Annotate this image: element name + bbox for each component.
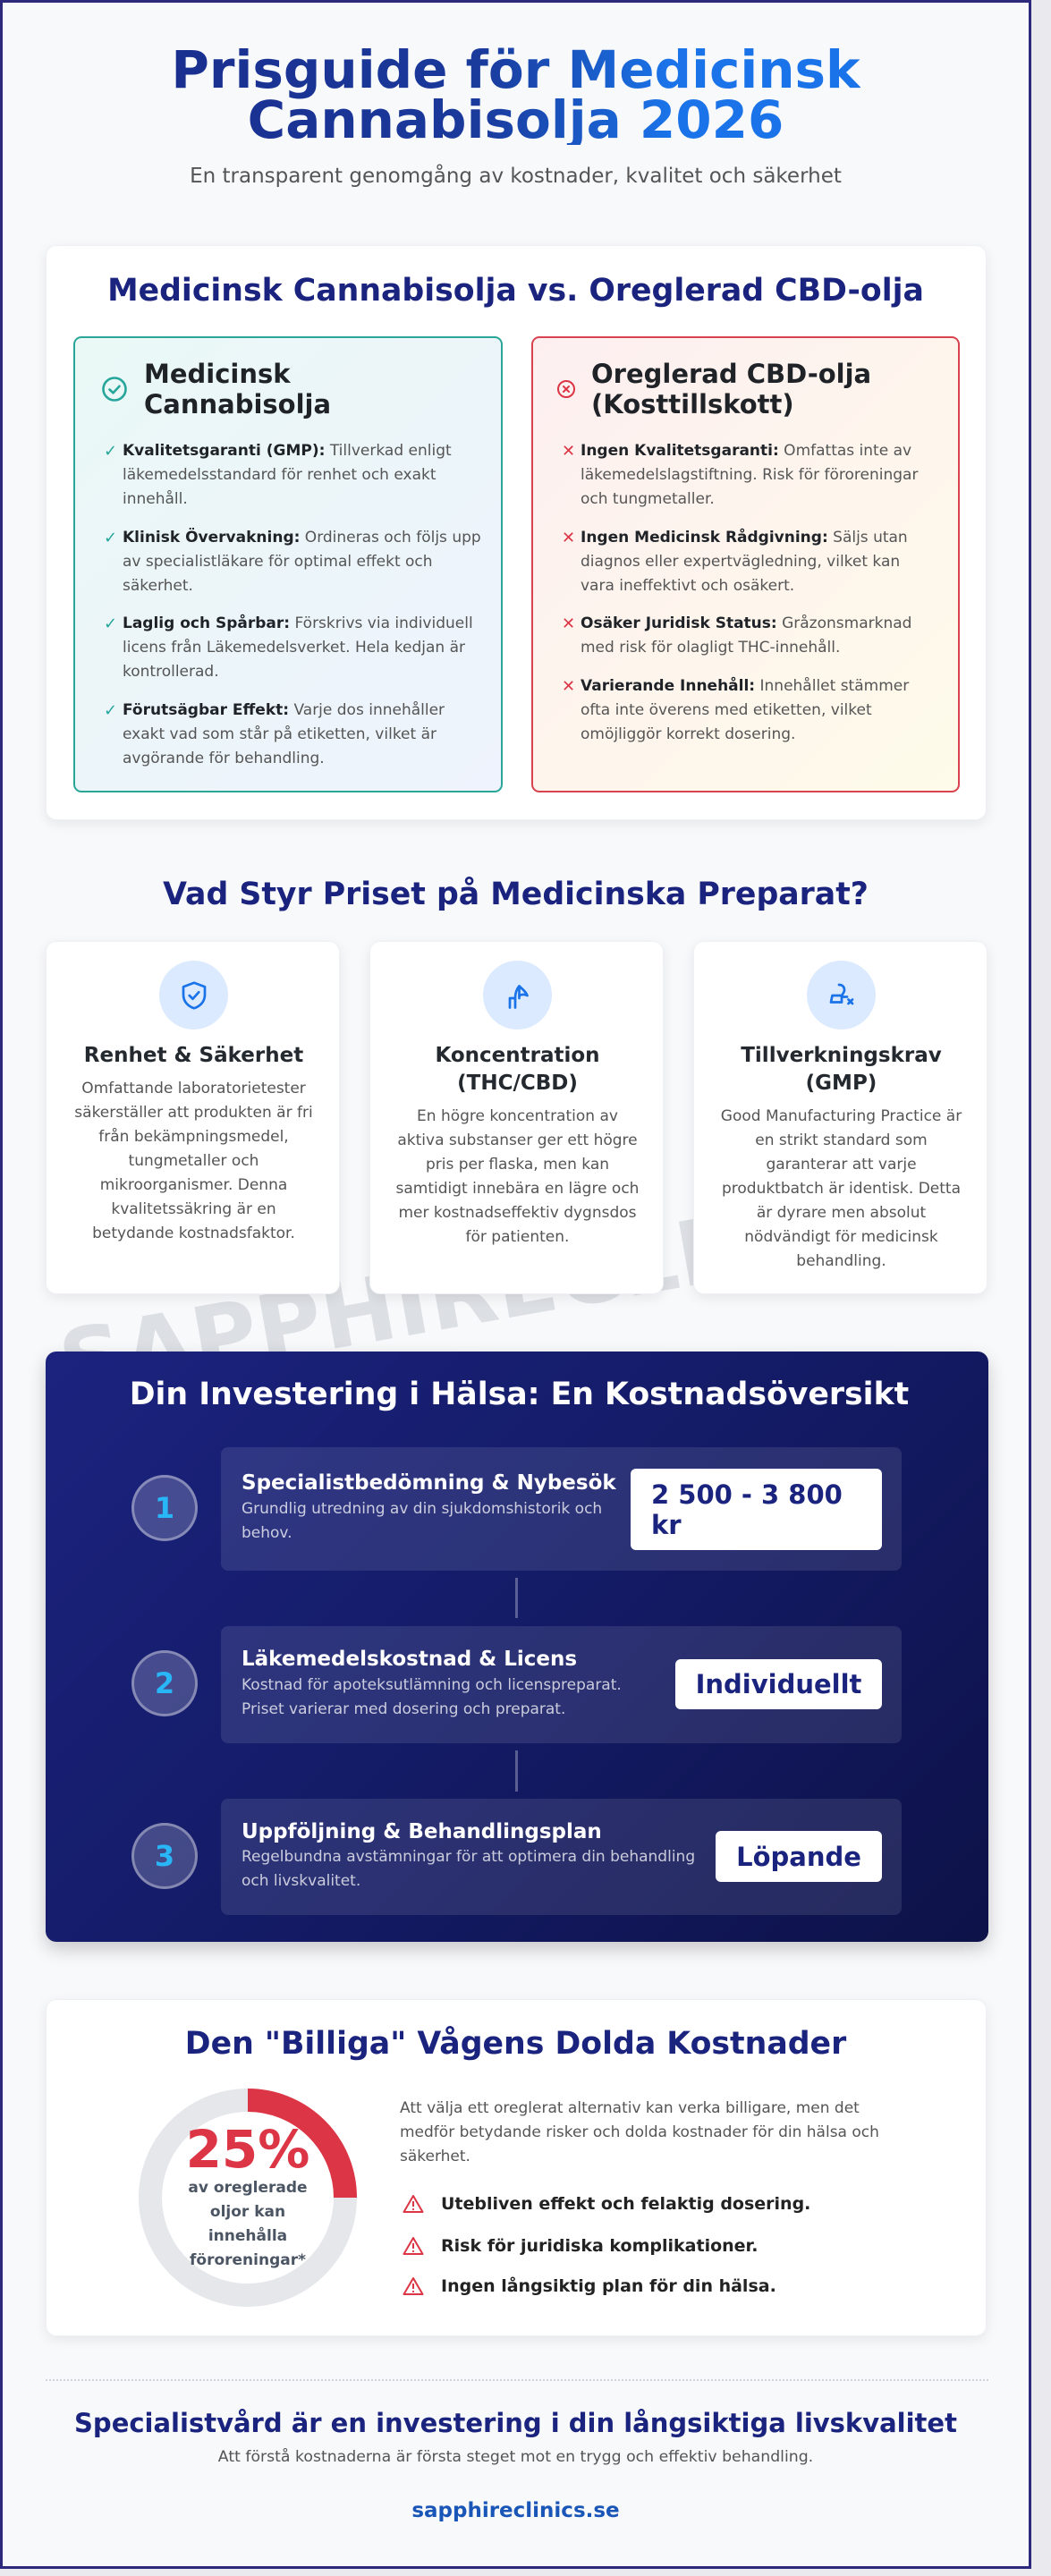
step 1: [221, 1447, 902, 1571]
footer heading: Specialistvård är en investering i din långsiktiga livskvalitet: [74, 2408, 957, 2438]
card: gmp: [693, 941, 987, 1294]
text: Risk för juridiska komplikationer.: [441, 2236, 758, 2256]
title: Cannabisolja 2026: [248, 89, 784, 150]
box: oreglerad: ✕: [562, 442, 575, 461]
warnings: [403, 2194, 810, 2296]
hidden costs heading: Den "Billiga" Vågens Dolda Kostnader: [185, 2026, 846, 2062]
card: gmp: Tillverkningskrav: [741, 1044, 942, 1067]
comparison heading: Medicinsk Cannabisolja vs. Oreglerad CBD-olja: [107, 273, 924, 309]
card: gmp: Good Manufacturing Practice är en strikt standard som garanterar att varje produktbatch är identisk. Detta är dyrare men absolut nödvändigt för medicinsk behandling.: [721, 1107, 962, 1270]
text: av oreglerade oljor kan innehålla föroreningar*: [188, 2179, 308, 2269]
card: renhet: [46, 941, 340, 1294]
text: 1: [155, 1491, 174, 1525]
box: medicinsk: [73, 336, 503, 792]
list: Klinisk Övervakning: Ordineras och följs upp av specialistläkare för optimal effekt och säkerhet.: [123, 528, 481, 594]
box heading: [144, 359, 331, 419]
paragraph: Att välja ett oreglerat alternativ kan verka billigare, men det medför betydande risker och dolda kostnader för din hälsa och säkerhet.: [400, 2099, 879, 2165]
text: 2: [155, 1666, 174, 1700]
title: Prisguide för Medicinsk: [171, 39, 860, 100]
card: gmp: (GMP): [806, 1072, 877, 1095]
card: renhet: Omfattande laboratorietester säkerställer att produkten är fri från bekämpningsmedel, tungmetaller och mikroorganismer. Denna kvalitetssäkring är en betydande kostnadsfaktor.: [74, 1080, 313, 1242]
price: löpande: [716, 1831, 882, 1882]
title: [171, 39, 860, 150]
card: renhet: Renhet & Säkerhet: [84, 1044, 303, 1067]
box: medicinsk: ✓: [104, 701, 117, 719]
price: 2500-3800: 2 500 - 3 800: [651, 1479, 843, 1510]
box heading: [591, 359, 871, 419]
box: oreglerad: ✕: [562, 528, 575, 547]
panel: comparison: [46, 245, 987, 820]
text: Regelbundna avstämningar för att optimera din behandling och livskvalitet.: [242, 1848, 695, 1890]
card: koncentration: (THC/CBD): [457, 1072, 578, 1095]
text: Uppföljning & Behandlingsplan: [242, 1820, 602, 1843]
icon: shield: [159, 961, 228, 1030]
list: [104, 442, 481, 767]
icon: plant hand: [483, 961, 552, 1030]
text: Ingen långsiktig plan för din hälsa.: [441, 2276, 776, 2296]
heading: price factors: Vad Styr Priset på Medicinska Preparat?: [163, 877, 869, 912]
box heading: Medicinsk: [144, 359, 291, 389]
icon: x circle: [557, 380, 575, 398]
footer link: sapphireclinics.se: [411, 2499, 620, 2522]
list: Förutsägbar Effekt: Varje dos innehåller exakt vad som står på etiketten, vilket är avgörande för behandling.: [123, 701, 445, 767]
price: 2500-3800: [631, 1469, 882, 1550]
box: oreglerad: ✕: [562, 614, 575, 633]
price: 2500-3800: kr: [651, 1510, 682, 1540]
list: Osäker Juridisk Status: Gråzonsmarknad med risk för olagligt THC-innehåll.: [581, 614, 911, 657]
card: koncentration: [369, 941, 664, 1294]
subtitle: En transparent genomgång av kostnader, kvalitet och säkerhet: [190, 165, 842, 188]
card: koncentration: En högre koncentration av aktiva substanser ger ett högre pris per flaska, men kan samtidigt innebära en lägre och mer kostnadseffektiv dygnsdos för patienten.: [396, 1107, 639, 1246]
box: oreglerad: ✕: [562, 676, 575, 696]
price: löpande: Löpande: [736, 1841, 861, 1871]
box: medicinsk: ✓: [104, 528, 117, 547]
list: Ingen Kvalitetsgaranti: Omfattas inte av läkemedelslagstiftning. Risk för föroreningar och tungmetaller.: [581, 442, 918, 508]
cost heading: Din Investering i Hälsa: En Kostnadsöversikt: [130, 1377, 909, 1412]
box heading: (Kosttillskott): [591, 389, 794, 419]
text: Specialistbedömning & Nybesök: [242, 1471, 616, 1495]
box: medicinsk: ✓: [104, 614, 117, 633]
footer subline: Att förstå kostnaderna är första steget mot en trygg och effektiv behandling.: [218, 2448, 813, 2466]
panel: hidden costs: [46, 1999, 987, 2336]
icon: factory: [807, 961, 876, 1030]
stat 25%: 25%: [186, 2119, 309, 2180]
icon: check circle: [102, 377, 127, 402]
card: koncentration: Koncentration: [435, 1044, 600, 1067]
list: Varierande Innehåll: Innehållet stämmer ofta inte överens med etiketten, vilket omöjliggör korrekt dosering.: [581, 676, 909, 742]
text: Utebliven effekt och felaktig dosering.: [441, 2194, 810, 2214]
box heading: Cannabisolja: [144, 389, 331, 419]
step 3: [221, 1799, 902, 1915]
list: Kvalitetsgaranti (GMP): Tillverkad enligt läkemedelsstandard för renhet och exakt innehåll.: [123, 442, 452, 508]
text: Läkemedelskostnad & Licens: [242, 1648, 577, 1671]
list: Ingen Medicinsk Rådgivning: Säljs utan diagnos eller expertvägledning, vilket kan vara ineffektivt och osäkert.: [581, 528, 908, 594]
box: medicinsk: ✓: [104, 442, 117, 461]
text: 3: [155, 1839, 174, 1873]
list: [562, 442, 918, 742]
box: oreglerad: [531, 336, 960, 792]
text: Kostnad för apoteksutlämning och licenspreparat. Priset varierar med dosering och preparat.: [242, 1676, 622, 1718]
watermark: SAPPHIRECLINICS: [52, 1157, 955, 1417]
box heading: Oreglerad CBD-olja: [591, 359, 871, 389]
text: Grundlig utredning av din sjukdomshistorik och behov.: [242, 1500, 602, 1542]
price: individuellt: [675, 1659, 882, 1709]
step 2: [221, 1626, 902, 1743]
panel: cost overview: [46, 1352, 988, 1942]
list: Laglig och Spårbar: Förskrivs via individuell licens från Läkemedelsverket. Hela kedjan är kontrollerad.: [123, 614, 473, 681]
donut chart: [139, 2089, 357, 2307]
price: individuellt: Individuellt: [696, 1669, 861, 1699]
